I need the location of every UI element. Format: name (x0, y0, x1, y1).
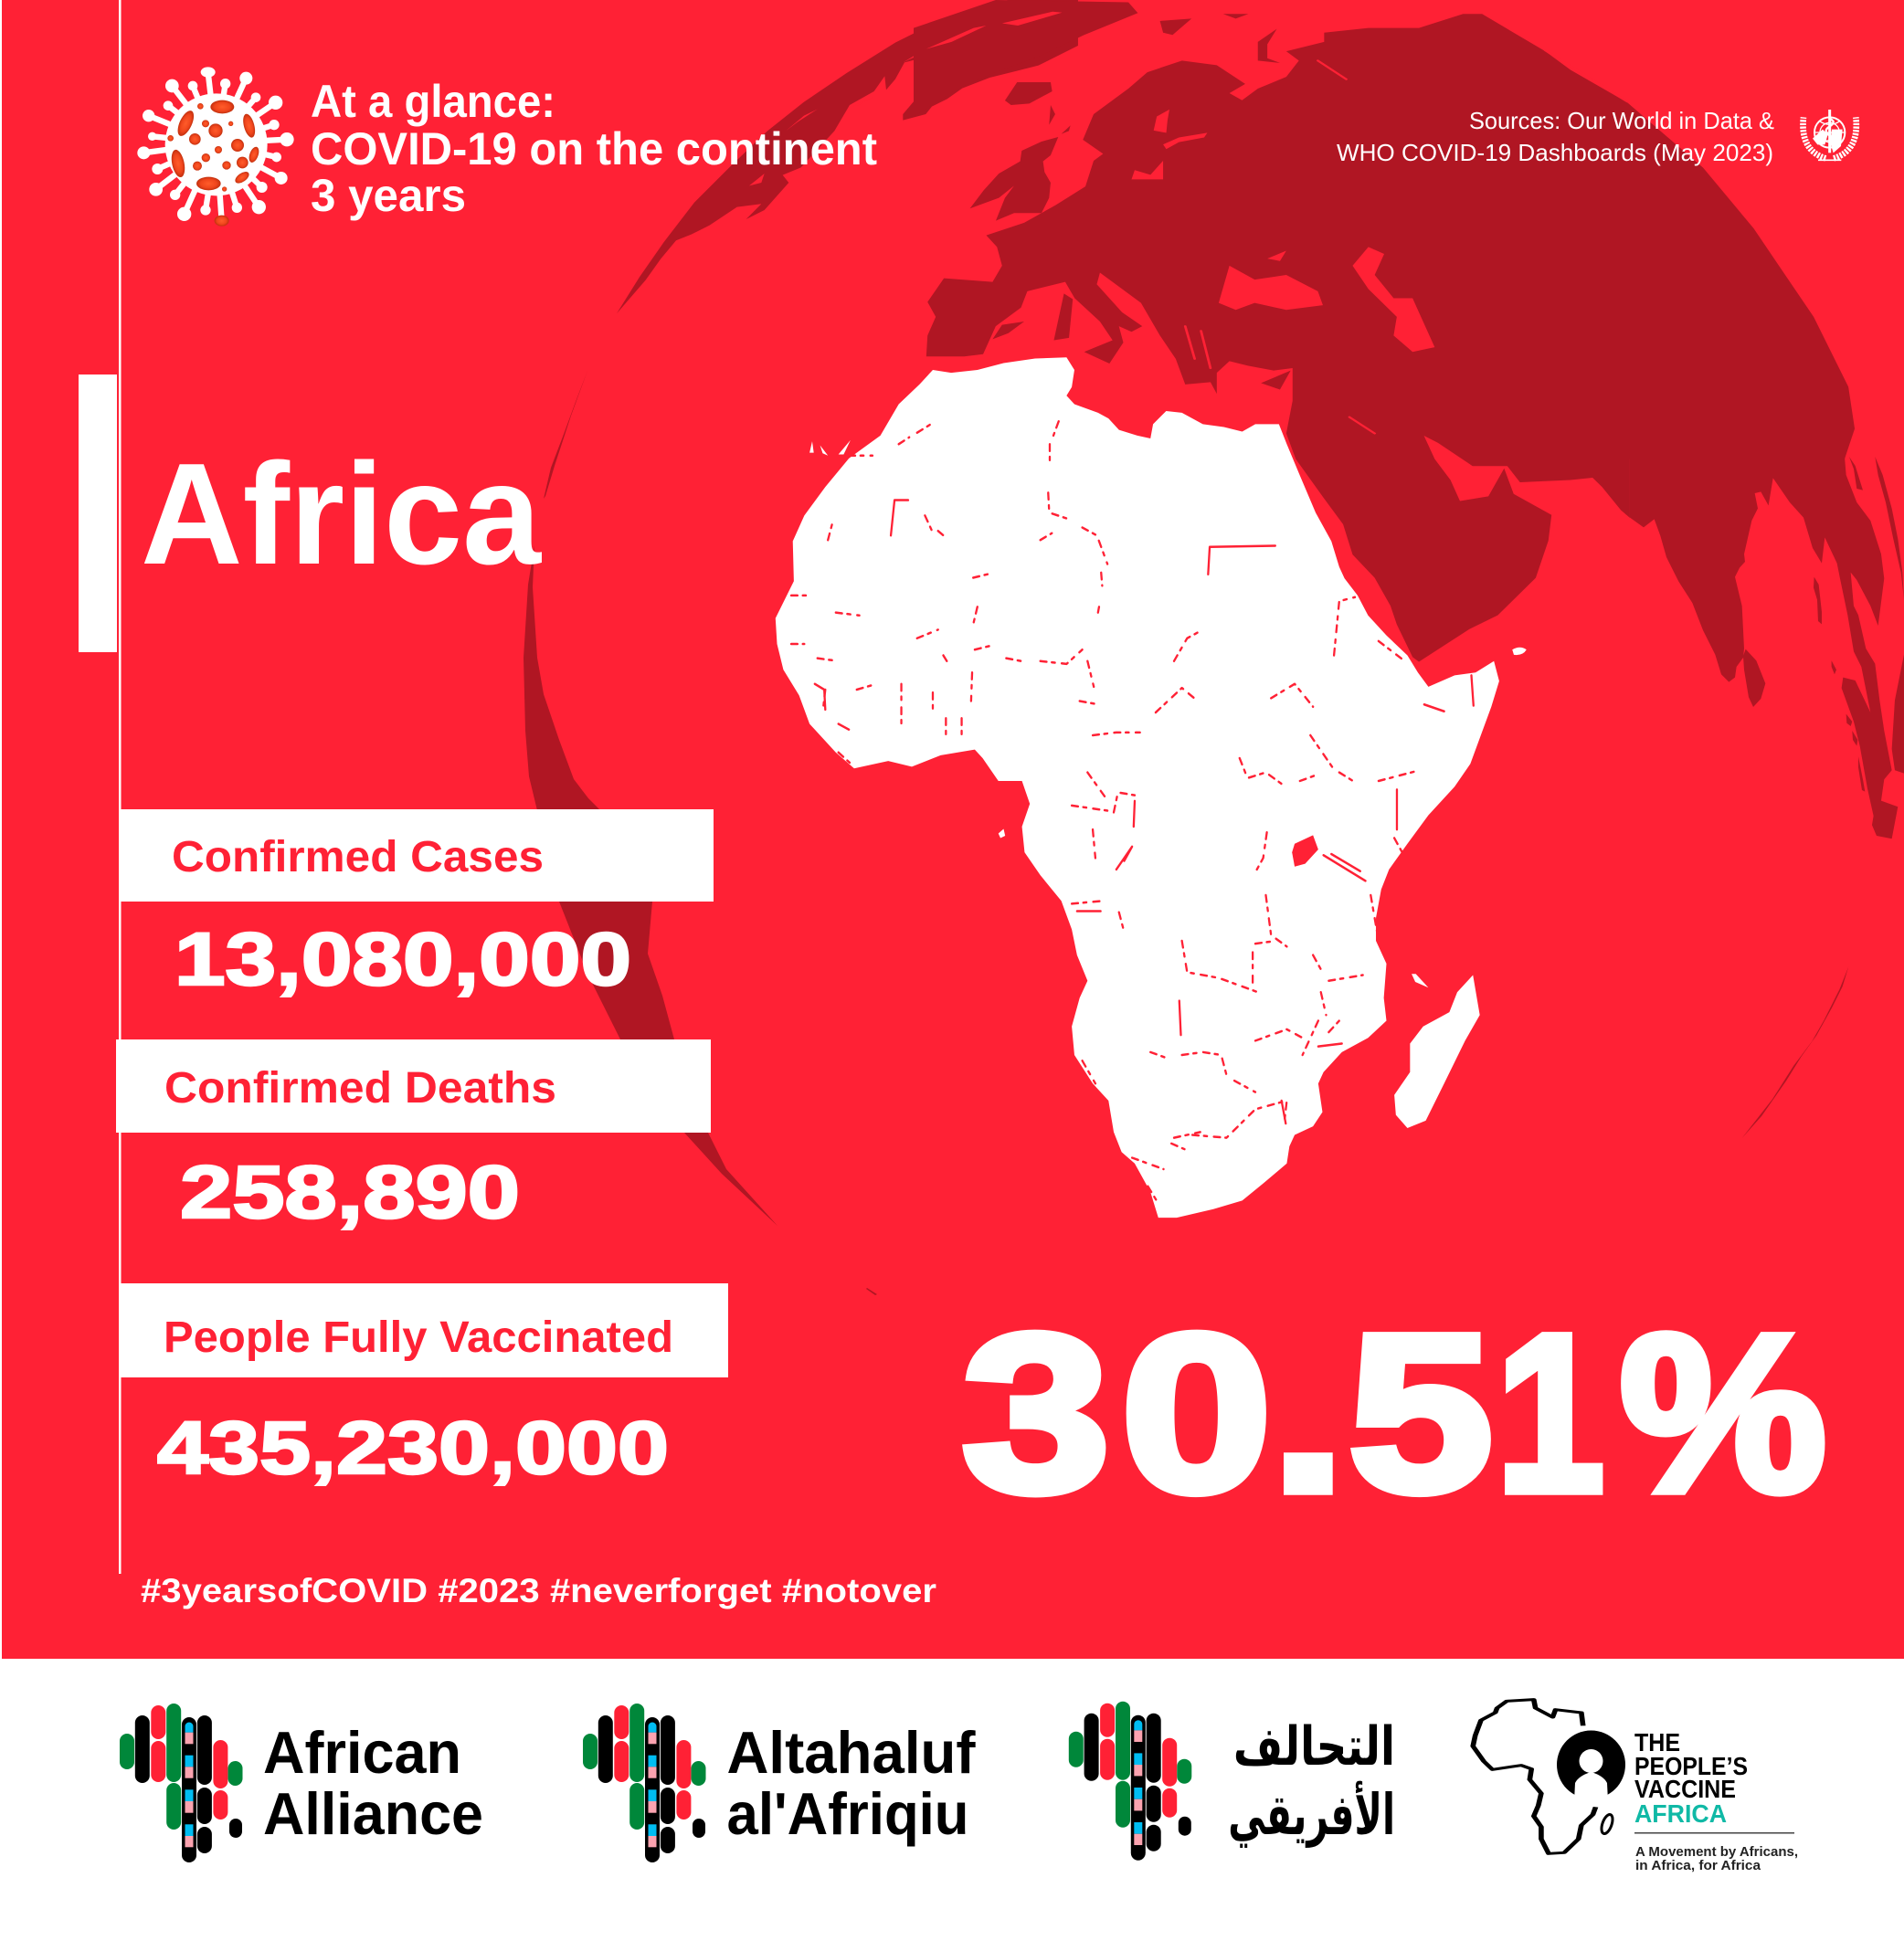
map: Africa silhouette with borders (776, 357, 1527, 1218)
label: Confirmed Cases (172, 833, 544, 881)
wordmark (1634, 1728, 1748, 1828)
title: At a glance: At a glance: (311, 76, 555, 127)
logo mark (120, 1704, 243, 1862)
title: At a glance: 3 years (311, 170, 466, 221)
big percentage: 3 (962, 1288, 1110, 1538)
white accent bar (79, 374, 117, 652)
Madagascar and islands (809, 440, 1527, 1128)
map: North America and Greenland arc (617, 0, 1137, 313)
panel: confirmed cases (120, 809, 714, 1001)
big percentage: . (1271, 1288, 1346, 1538)
map: Black Sea, Caspian and Baltic cut-outs (1131, 110, 1434, 352)
logo wordmark (1228, 1715, 1395, 1848)
big percentage: % (1620, 1288, 1826, 1538)
wordmark: THE (1634, 1728, 1680, 1756)
big percentage: 0 (1121, 1288, 1272, 1538)
tagline (1635, 1844, 1798, 1873)
label box (121, 1283, 728, 1377)
logo wordmark: Altahaluf (727, 1719, 976, 1786)
label box (116, 1039, 711, 1133)
map: British Isles (970, 137, 1058, 221)
Africa land (776, 357, 1499, 1218)
title: At a glance (311, 76, 877, 221)
logo wordmark (727, 1719, 976, 1847)
label: Confirmed Deaths (164, 1064, 556, 1113)
heading: Africa: Africa (141, 434, 542, 595)
logo wordmark: Alliance (263, 1780, 483, 1847)
left vertical white rule (119, 0, 121, 1574)
sources text: WHO COVID-19 Dashboards (May 2023) (1337, 139, 1773, 166)
Madagascar outline (1600, 1813, 1614, 1835)
globe map: dark landmasses (524, 0, 1904, 1295)
sources text (1337, 107, 1774, 166)
logo: African Alliance (120, 1704, 483, 1862)
map: South America globe-edge sliver (524, 371, 877, 1295)
panel: people fully vaccinated (121, 1283, 728, 1490)
tagline: A Movement by Africans, (1635, 1844, 1798, 1860)
logo: Altahaluf al'Afriqiu (583, 1704, 976, 1862)
logo wordmark: al'Afriqiu (727, 1780, 968, 1847)
label: People Fully Vaccinated (164, 1313, 673, 1362)
country borders (891, 501, 1474, 1035)
wordmark: AFRICA (1634, 1799, 1727, 1828)
logo wordmark: الأفريقي (1228, 1780, 1395, 1848)
Lake Victoria (1292, 835, 1318, 867)
panel: confirmed deaths (116, 1039, 711, 1234)
tagline: in Africa, for Africa (1635, 1858, 1761, 1873)
wordmark: PEOPLE’S (1634, 1752, 1748, 1780)
map: India, Southeast Asia and islands (1630, 457, 1904, 839)
person in circle (1557, 1730, 1625, 1801)
logo: The People's Vaccine Africa (1473, 1700, 1798, 1873)
value: 13,080,000 (175, 918, 631, 1001)
logo wordmark: African (263, 1719, 461, 1786)
icon: WHO emblem (1804, 110, 1856, 160)
hashtags: #3yearsofCOVID #2023 #neverforget #notover (141, 1572, 936, 1609)
big percentage (962, 1288, 1826, 1538)
value: 435,230,000 (157, 1407, 669, 1490)
Africa outline (1473, 1700, 1596, 1853)
map: Eurasia and Arabia (926, 14, 1855, 661)
title: At a glance: COVID-19 on the continent (311, 123, 877, 174)
big percentage: 1 (1497, 1288, 1604, 1538)
logo mark (1069, 1702, 1191, 1861)
divider (1634, 1832, 1794, 1834)
map: Iceland and North Atlantic islands (1005, 82, 1071, 134)
big percentage: 5 (1349, 1288, 1493, 1538)
logo: Arabic alliance (1069, 1702, 1395, 1861)
logo wordmark: التحالف (1233, 1715, 1395, 1777)
logo wordmark (263, 1719, 483, 1847)
value: 258,890 (180, 1151, 520, 1234)
icon: coronavirus (137, 67, 294, 227)
map: Eastern globe-edge arc (1742, 966, 1848, 1138)
wordmark: VACCINE (1634, 1775, 1736, 1803)
sources text: Sources: Our World in Data & (1469, 107, 1774, 134)
logo mark (583, 1704, 705, 1862)
label box (120, 809, 714, 902)
